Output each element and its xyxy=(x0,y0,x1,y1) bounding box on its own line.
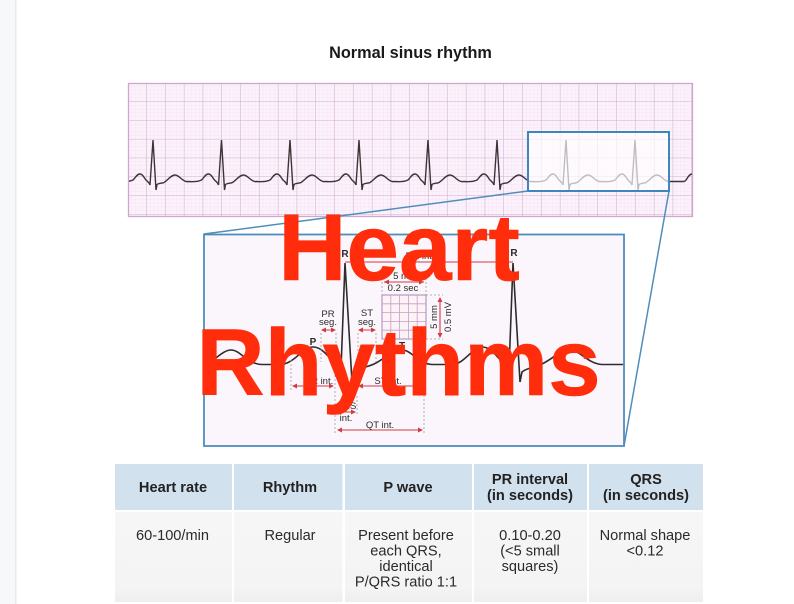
table body row: identical xyxy=(379,559,433,575)
table body row: <0.12 xyxy=(627,544,663,560)
table header row: (in seconds) xyxy=(487,488,573,504)
overlay headline: Rhythms xyxy=(196,310,601,416)
table body row: Normal shape xyxy=(600,528,690,544)
overlay headline: Heart xyxy=(278,195,520,301)
ECG labels: R xyxy=(510,248,518,259)
ECG labels: 0.2 sec xyxy=(388,283,419,294)
table header row: QRS xyxy=(630,472,662,488)
ECG labels: 5 mm xyxy=(429,305,440,329)
ECG labels: int. xyxy=(340,413,352,424)
ECG labels: PR int. xyxy=(305,376,333,387)
title: Normal sinus rhythm xyxy=(329,44,492,62)
enlarged ECG trace xyxy=(205,263,623,382)
ECG labels: PR xyxy=(321,309,335,320)
table header row: (in seconds) xyxy=(603,488,689,504)
overlay headline xyxy=(196,195,601,416)
highlighted strip section xyxy=(528,132,669,191)
ECG labels: R xyxy=(341,249,349,260)
ECG strip xyxy=(119,83,693,217)
table header row: P wave xyxy=(383,480,433,496)
red interval arrows xyxy=(293,262,513,430)
one big ECG square xyxy=(382,295,426,339)
ECG labels: seg. xyxy=(358,317,376,328)
table header row: Rhythm xyxy=(263,480,317,496)
table body row: Present before xyxy=(358,528,454,544)
table body row: each QRS, xyxy=(370,544,442,560)
ECG labels xyxy=(305,248,518,431)
table body row: Regular xyxy=(264,528,316,544)
ECG labels: P xyxy=(310,337,317,348)
ECG labels: seg. xyxy=(319,317,337,328)
data table xyxy=(115,464,703,602)
ECG labels: ST int. xyxy=(374,376,402,387)
arrow heads xyxy=(292,280,442,432)
ECG labels: 5 mm xyxy=(393,271,417,282)
ECG trace xyxy=(119,140,692,190)
zoom connector lines xyxy=(204,191,669,446)
table body row: (<5 small xyxy=(500,544,560,560)
table body row: P/QRS ratio 1:1 xyxy=(355,574,457,590)
dotted guide lines xyxy=(291,278,443,434)
ECG labels: QT int. xyxy=(366,420,394,431)
ECG labels: RR int. xyxy=(405,251,435,262)
table header row: PR interval xyxy=(492,472,568,488)
ECG labels: T xyxy=(399,341,405,352)
table header row xyxy=(115,464,703,510)
enlarged ECG panel xyxy=(204,234,624,446)
table body row: squares) xyxy=(502,559,558,575)
table header row: Heart rate xyxy=(139,480,207,496)
ECG labels: ST xyxy=(361,308,373,319)
ECG labels: QRS xyxy=(336,401,356,412)
table body row: 60-100/min xyxy=(136,528,209,544)
ECG labels: 0.5 mV xyxy=(443,301,454,332)
table body row: 0.10-0.20 xyxy=(499,528,561,544)
table body row xyxy=(115,512,703,602)
left sidebar xyxy=(0,0,16,604)
